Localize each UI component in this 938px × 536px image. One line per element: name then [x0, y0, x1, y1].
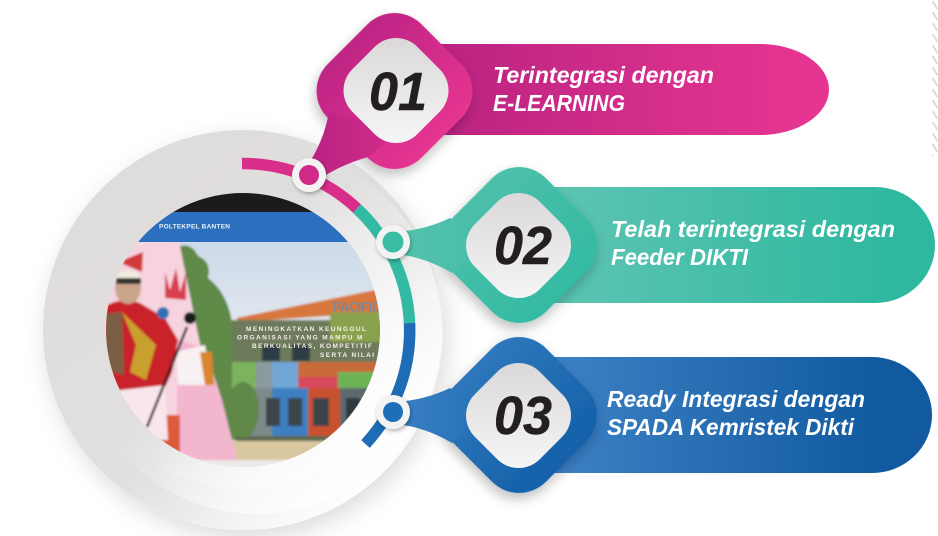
text 02: Telah terintegrasi dengan: [611, 216, 895, 242]
node 01: [292, 158, 326, 192]
item 02: [376, 151, 935, 339]
photo: baton: [147, 327, 187, 427]
item 03: [376, 321, 932, 509]
inner diamond 02: [454, 181, 583, 310]
photo: sky: [171, 242, 380, 322]
photo: caption: [237, 326, 375, 359]
photo: header text: POLTEKPEL BANTEN: [159, 224, 230, 230]
photo: pink figure: [176, 340, 237, 460]
text 02: Feeder DIKTI: [611, 244, 749, 270]
text 01: Terintegrasi dengan: [493, 62, 714, 88]
segmented arc: [242, 163, 410, 444]
text 01: E-LEARNING: [493, 90, 625, 116]
band 01: [420, 44, 829, 135]
pointer 01: [304, 112, 400, 180]
photo: flags: [118, 252, 143, 272]
decorative hatch strip: [932, 0, 938, 156]
photo: caption: ORGANISASI YANG MAMPU M: [237, 334, 364, 342]
photo: top black bar: [174, 193, 312, 212]
photo: officer: [106, 299, 180, 392]
number 02: 02: [494, 216, 552, 276]
photo circle: [100, 190, 390, 470]
photo: colour bands: [232, 362, 256, 388]
photo: ground: [232, 440, 324, 462]
photo: PACIFIC sign: PACIFIC: [333, 299, 381, 316]
photo: blue header: [138, 212, 348, 242]
diamond 01: [301, 0, 488, 185]
pointer 03: [396, 388, 480, 443]
arc: teal: [357, 208, 410, 323]
text 03: [607, 386, 865, 440]
pointer 02: [396, 218, 480, 273]
item 01: [292, 0, 829, 192]
diamond 03: [425, 321, 613, 509]
inner diamond 03: [454, 351, 583, 480]
photo: building upper: [232, 320, 382, 364]
photo: trees: [180, 245, 240, 440]
photo: roof: [236, 288, 385, 322]
photo: left pink panel: [108, 242, 202, 417]
photo: caption: SERTA NILAI: [320, 352, 375, 359]
band 03: [540, 357, 932, 473]
arc: blue: [366, 323, 410, 444]
photo: ground floor: [248, 386, 274, 438]
node 03: [376, 395, 410, 429]
node 02: [376, 225, 410, 259]
diamond 02: [425, 151, 613, 339]
arc: pink: [242, 163, 357, 208]
number 01: 01: [369, 62, 427, 122]
text 03: SPADA Kemristek Dikti: [607, 414, 855, 440]
inner diamond 01: [331, 26, 461, 155]
large background circle: [43, 130, 443, 530]
text 03: Ready Integrasi dengan: [607, 386, 865, 412]
band 02: [540, 187, 935, 303]
photo: caption: MENINGKATKAN KEUNGGUL: [246, 326, 367, 333]
text 01: [493, 62, 714, 116]
text 02: [611, 216, 895, 270]
photo: caption: BERKUALITAS, KOMPETITIF: [252, 343, 373, 350]
number 03: 03: [494, 386, 552, 446]
